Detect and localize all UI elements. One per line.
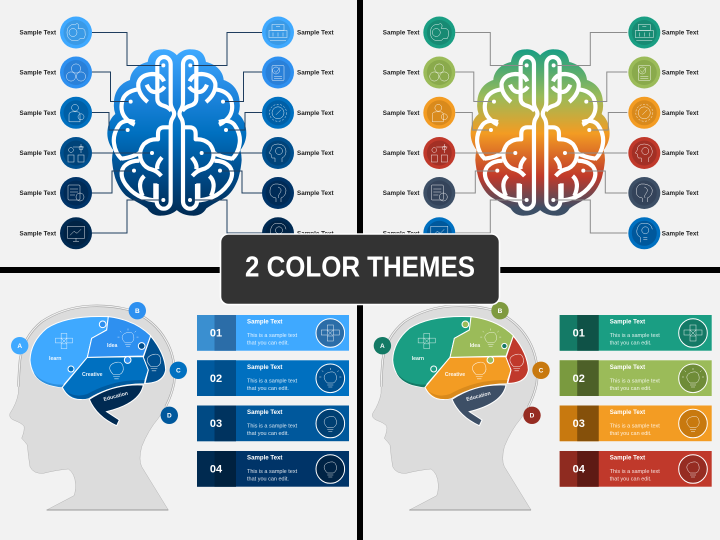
brain labels and icons: Education xyxy=(466,391,491,403)
markers A B C D: B xyxy=(498,308,503,315)
left labelled icons: Sample Text xyxy=(20,230,57,237)
card 02: that you can edit. xyxy=(247,386,289,392)
left labelled icons: Sample Text xyxy=(383,30,420,36)
brain connector dots xyxy=(489,63,591,202)
brain labels and icons: learn xyxy=(412,356,424,362)
card 01: This is a sample text xyxy=(247,333,298,339)
card 02: 02 xyxy=(573,373,585,385)
left labelled icons xyxy=(383,16,455,249)
piece: idea xyxy=(450,317,513,357)
right labelled icons: Sample Text xyxy=(662,150,699,157)
right labelled icons: Sample Text xyxy=(662,70,699,76)
card 03: 03 xyxy=(573,418,585,430)
left labelled icons: Sample Text xyxy=(20,150,57,157)
right labelled icons: Sample Text xyxy=(297,190,335,197)
card 04: 04 xyxy=(210,464,223,476)
brain connector dots xyxy=(126,63,228,202)
card 02: Sample Text xyxy=(247,364,282,371)
card 01: 01 xyxy=(573,328,585,340)
multicolor brain graphic xyxy=(471,49,610,216)
card 03: that you can edit. xyxy=(610,431,652,437)
left labelled icons: Sample Text xyxy=(20,190,57,197)
left labelled icons: Sample Text xyxy=(383,110,420,117)
left labelled icons xyxy=(20,16,92,249)
connector lines xyxy=(455,32,627,233)
panel: multicolor brain xyxy=(363,0,720,267)
left labelled icons: Sample Text xyxy=(383,150,420,157)
card 03: Sample Text xyxy=(247,409,282,416)
markers A B C D: C xyxy=(539,368,544,375)
right labelled icons: Sample Text xyxy=(662,230,699,237)
card 01: Sample Text xyxy=(247,318,282,326)
left labelled icons: Sample Text xyxy=(20,30,57,36)
right labelled icons: Sample Text xyxy=(662,190,699,197)
banner: 2 color themes xyxy=(220,234,500,304)
brain puzzle xyxy=(30,316,166,426)
left labelled icons: Sample Text xyxy=(383,70,420,76)
card 01: This is a sample text xyxy=(610,333,660,339)
brain puzzle xyxy=(393,316,528,426)
brain labels and icons: learn xyxy=(49,356,61,362)
card 04: This is a sample text xyxy=(610,469,660,475)
left labelled icons: Sample Text xyxy=(383,190,420,197)
piece: creative xyxy=(425,357,511,400)
left labelled icons: Sample Text xyxy=(20,110,57,117)
left labelled icons: Sample Text xyxy=(20,70,57,76)
card 03 xyxy=(560,406,712,441)
piece: creative xyxy=(62,357,148,400)
brain labels and icons xyxy=(49,329,161,403)
brain labels and icons: Idea xyxy=(470,343,480,349)
brain labels and icons: Education xyxy=(103,391,129,403)
card 03: that you can edit. xyxy=(247,431,289,437)
piece: right lobe xyxy=(143,336,166,383)
piece: right lobe xyxy=(506,336,528,383)
right labelled icons: Sample Text xyxy=(662,110,699,117)
banner: 2 color themes: 2 COLOR THEMES xyxy=(245,252,475,284)
card 04 xyxy=(197,451,349,487)
puzzle knobs xyxy=(68,321,145,372)
piece: idea xyxy=(87,317,151,357)
card 02 xyxy=(560,360,712,396)
markers A B C D xyxy=(374,302,550,424)
card 02: 02 xyxy=(210,373,222,385)
card 03 xyxy=(197,406,349,441)
card 03: This is a sample text xyxy=(247,424,298,430)
card 04: that you can edit. xyxy=(610,476,652,482)
brain labels and icons: Idea xyxy=(107,343,117,349)
connector lines xyxy=(92,32,262,233)
markers A B C D: A xyxy=(17,343,22,350)
right labelled icons: Sample Text xyxy=(297,30,335,36)
left labelled icons: Sample Text xyxy=(383,230,420,237)
panel: blue brain xyxy=(0,0,357,267)
card 01 xyxy=(197,315,349,351)
markers A B C D: D xyxy=(167,413,172,420)
piece: learn xyxy=(30,316,108,387)
brain graphic xyxy=(107,49,246,216)
card 03: 03 xyxy=(210,418,222,430)
card 01 xyxy=(560,315,712,351)
brain labels and icons xyxy=(412,329,524,403)
card 02: This is a sample text xyxy=(247,378,298,384)
piece: learn xyxy=(393,316,471,387)
head silhouette xyxy=(372,306,537,510)
card 02: that you can edit. xyxy=(610,386,652,392)
card 04: Sample Text xyxy=(247,454,282,462)
card 01: 01 xyxy=(210,328,222,340)
card 04 xyxy=(560,451,712,487)
markers A B C D: A xyxy=(380,343,385,350)
card 01: Sample Text xyxy=(610,318,645,326)
piece: education xyxy=(89,385,143,426)
right labelled icons xyxy=(262,16,335,249)
card 02: This is a sample text xyxy=(610,378,660,384)
right labelled icons: Sample Text xyxy=(297,110,335,117)
card 04: This is a sample text xyxy=(247,469,298,475)
piece: education xyxy=(452,385,506,426)
right labelled icons: Sample Text xyxy=(662,30,699,36)
right labelled icons: Sample Text xyxy=(297,150,335,157)
markers A B C D: B xyxy=(135,308,140,315)
brain labels and icons: Creative xyxy=(445,372,465,378)
markers A B C D: D xyxy=(530,413,535,420)
right labelled icons: Sample Text xyxy=(297,230,335,237)
card 01: that you can edit. xyxy=(610,340,652,346)
card 04: that you can edit. xyxy=(247,476,289,482)
puzzle knobs xyxy=(431,321,507,372)
brain labels and icons: Creative xyxy=(82,372,103,378)
right labelled icons xyxy=(628,16,699,249)
card 04: 04 xyxy=(573,464,586,476)
card 01: that you can edit. xyxy=(247,340,289,346)
head silhouette xyxy=(10,306,175,510)
card 02 xyxy=(197,360,349,396)
card 03: This is a sample text xyxy=(610,424,660,430)
panel: blue head xyxy=(0,273,357,540)
right labelled icons: Sample Text xyxy=(297,70,335,76)
card 04: Sample Text xyxy=(610,454,645,462)
markers A B C D: C xyxy=(176,368,181,375)
markers A B C D xyxy=(11,302,187,424)
card 03: Sample Text xyxy=(610,409,645,416)
panel: multicolor head xyxy=(363,273,720,540)
card 02: Sample Text xyxy=(610,364,645,371)
